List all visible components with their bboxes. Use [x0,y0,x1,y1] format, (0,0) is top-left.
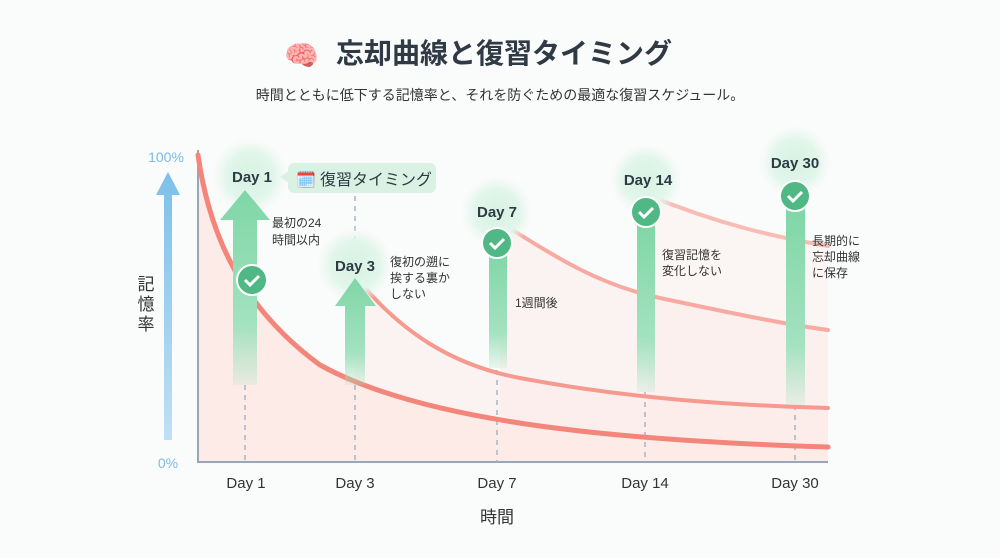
Day 30 review: に保存 [812,266,848,280]
Day 1 review [212,138,322,385]
title: 🧠 [284,40,319,71]
x axis labels: Day 30 [771,475,819,492]
y axis label: 率 [138,315,154,334]
Day 14 review: Day 14 [624,172,673,189]
fills [198,155,828,462]
Day 14 review [610,144,722,392]
forgetting curves [198,155,828,447]
x axis labels [226,475,819,492]
x axis labels: Day 7 [477,475,517,492]
callout: review timing: 🗓️ [296,170,316,189]
subtitle: 時間とともに低下する記憶率と、それを防ぐための最適な復習スケジュール。 [256,87,744,103]
Day 30 review: Day 30 [771,155,819,172]
Day 3 review: Day 3 [335,258,375,275]
Day 3 review [317,227,450,385]
Day 7 review: 1週間後 [515,296,558,310]
Day 3 review: 復初の遡に [390,254,450,269]
Day 14 review: 復習記憶を [662,247,722,262]
Day 1 review: 時間以内 [272,233,320,247]
y axis arrow: 0% [158,455,178,471]
x axis labels: Day 1 [226,475,266,492]
Day 14 review: 変化しない [662,263,722,278]
Day 30 review [759,126,860,405]
dashed guides [245,196,795,462]
y axis label [138,275,154,334]
y axis arrow: 100% [148,149,184,165]
axes [198,150,828,462]
title: 忘却曲線と復習タイミング [336,37,672,69]
Day 7 review: Day 7 [477,204,517,221]
y axis arrow [148,149,184,471]
Day 1 review: 最初の24 [272,216,322,230]
Day 30 review: 忘却曲線 [812,249,860,264]
x axis labels: Day 3 [335,475,375,492]
y axis label: 憶 [138,295,154,314]
callout: review timing [280,163,436,193]
y axis label: 記 [138,275,154,294]
callout: review timing: 復習タイミング [320,171,432,189]
Day 1 review: Day 1 [232,169,272,186]
x axis title: 時間 [480,508,514,527]
Day 3 review: しない [390,287,426,301]
x axis labels: Day 14 [621,475,669,492]
Day 3 review: 挨する裏か [390,270,450,285]
Day 7 review [461,176,558,368]
Day 30 review: 長期的に [812,233,860,248]
